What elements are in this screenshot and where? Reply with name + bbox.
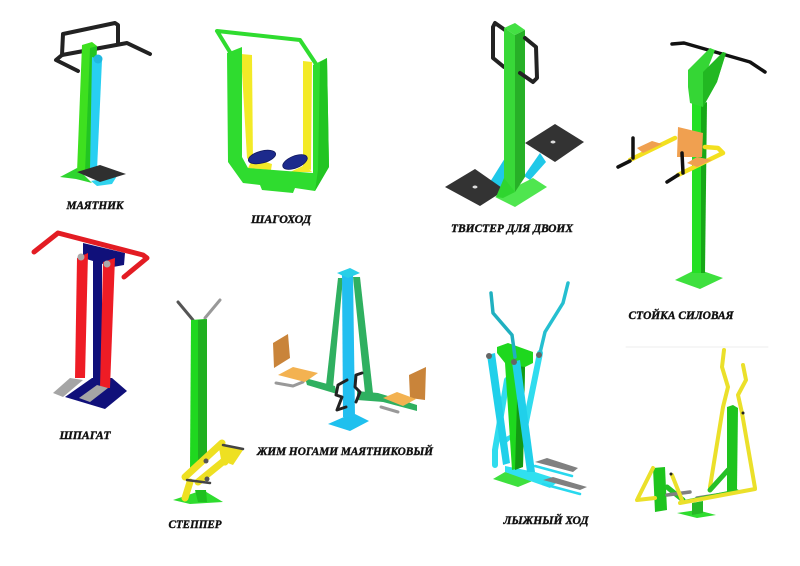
equipment: walker [217,31,329,193]
label: ski walker: ЛЫЖНЫЙ ХОД [503,512,589,527]
label: pendulum: МАЯТНИК [66,198,124,212]
equipment: stepper [173,300,243,504]
equipment: splits [34,233,147,409]
equipment: pendulum leg press [273,268,426,431]
equipment: twister for two [445,23,584,207]
equipment: ski walker [486,283,587,494]
label: twister for two: ТВИСТЕР ДЛЯ ДВОИХ [451,221,574,235]
label: walker: ШАГОХОД [250,212,312,226]
label: pendulum leg press: ЖИМ НОГАМИ МАЯТНИКОВЫЙ [256,443,434,458]
label: splits: ШПАГАТ [59,428,111,442]
equipment: pendulum [56,23,150,186]
label: stepper: СТЕППЕР [168,517,222,531]
label: power rack: СТОЙКА СИЛОВАЯ [628,307,734,322]
equipment: elliptical trainer [626,347,768,518]
equipment: power rack [618,43,765,289]
